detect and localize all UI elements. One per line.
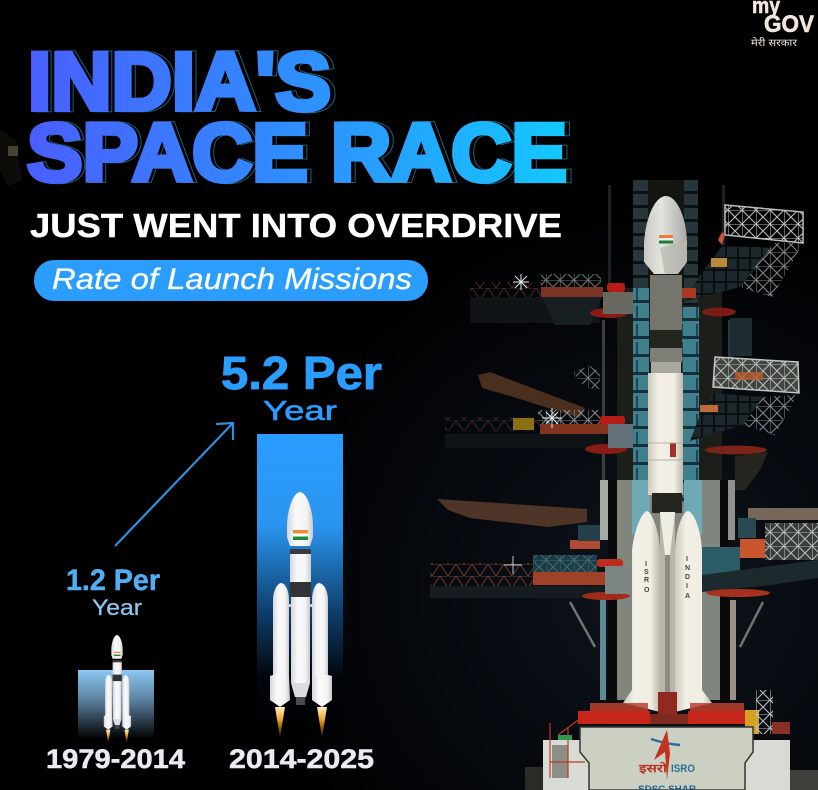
right booster [675,511,712,712]
lower left arm and platform [445,372,633,454]
pill heading: Rate of Launch Missions [52,263,412,296]
ISRO logo [638,730,697,790]
shroud wrap [660,240,687,274]
booster label ISRO: I [645,561,647,568]
booster label INDIA: I [686,556,688,563]
title outline inner [30,36,572,198]
ISRO logo: ISRO [671,763,695,775]
title outline shadow [30,36,572,198]
title outline inner: SPACE RACE [30,108,572,198]
tower backdrop [600,180,736,702]
left corner structure [0,130,22,186]
red railings [590,703,648,713]
left booster [623,511,660,712]
launch platform [525,690,818,790]
upper right platform [682,205,803,316]
booster label INDIA: N [685,565,690,572]
title: India's Space Race [27,36,572,198]
upper left platform [470,274,633,325]
booster label ISRO: O [644,587,650,594]
logo: myGov: मेरी सरकार [751,37,798,49]
upper stage grey [650,275,682,330]
title outline shadow: INDIA'S [31,36,336,128]
logo: myGov: GOV [764,11,814,38]
booster label INDIA: D [685,574,690,581]
value: 5.2 per year [221,347,382,426]
subtitle: JUST WENT INTO OVERDRIVE [30,207,562,244]
middle right platform [690,318,799,490]
title fill: SPACE RACE [27,108,567,198]
lens flares [504,274,562,574]
nose flag [659,235,673,244]
nose fairing [644,196,687,274]
title outline inner: INDIA'S [31,36,336,128]
booster label INDIA: I [686,583,688,590]
center panel [580,727,753,790]
bar: 1979-2014 [78,670,154,738]
ISRO logo: इसरो [638,761,669,775]
bar: 2014-2025 [257,434,343,738]
label: 2014-2025: 2014-2025 [229,744,374,774]
rocket: 1979-2014 [104,635,131,743]
tower columns [632,180,702,535]
value: 1.2 per year [66,564,160,620]
pill heading [34,260,428,301]
booster label INDIA: A [685,593,690,600]
main white body [648,373,683,495]
logo: myGov [751,0,814,49]
value: 5.2 per year: Year [263,395,337,426]
booster label ISRO: R [644,577,649,584]
rocket: 2014-2025 [270,492,332,738]
title fill [27,36,567,198]
main rocket [623,196,712,724]
value: 1.2 per year: 1.2 Per [66,564,160,597]
third left arm [430,499,763,647]
value: 1.2 per year: Year [92,595,142,620]
title fill: INDIA'S [28,36,331,128]
label: 1979-2014: 1979-2014 [46,744,185,774]
value: 5.2 per year: 5.2 Per [221,347,382,399]
arrow [115,423,233,546]
title outline shadow: SPACE RACE [30,108,572,198]
booster label ISRO: S [644,569,649,576]
small truss [572,366,600,389]
stage ring [650,330,682,348]
central core [660,512,675,702]
lower right platform [702,508,818,597]
